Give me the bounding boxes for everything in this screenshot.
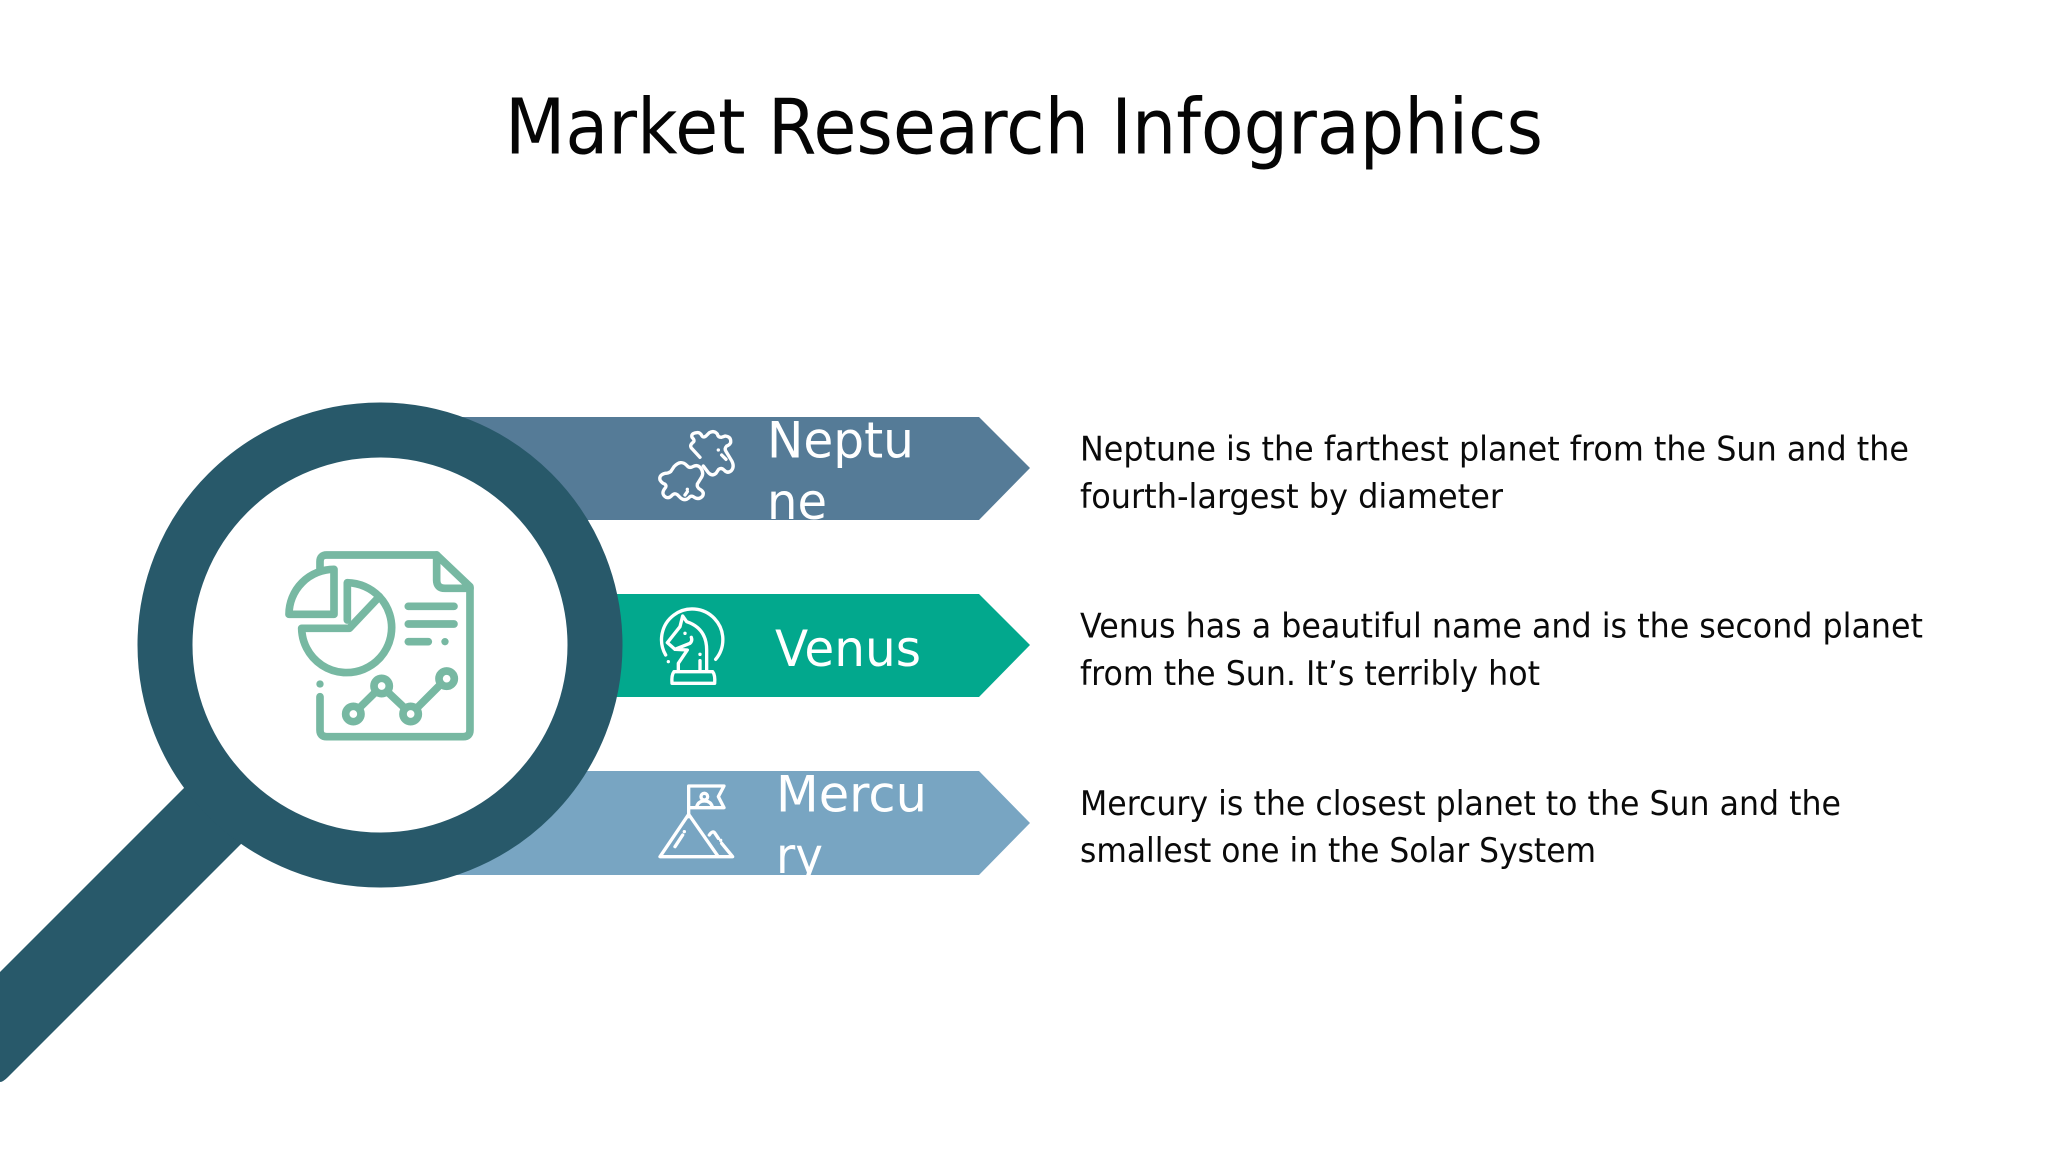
- label: Mercury: Mercu: [776, 766, 927, 824]
- text block: Neptune description: [1080, 430, 1909, 516]
- text block: Mercury description: [1080, 784, 1841, 870]
- text block: Venus description: from the Sun. It’s terribly hot: [1080, 654, 1540, 693]
- text block: Mercury description: smallest one in the Solar System: [1080, 831, 1596, 870]
- title: Market Research Infographics: [505, 84, 1543, 172]
- icon: puzzle pieces: [660, 432, 733, 500]
- text block: Neptune description: Neptune is the farthest planet from the Sun and the: [1080, 430, 1909, 468]
- label: Venus: Venus: [775, 620, 921, 678]
- icon: chess knight: [662, 609, 723, 683]
- text block: Venus description: [1080, 606, 1923, 693]
- label: Neptune: [771, 421, 910, 520]
- lens ring: [165, 430, 595, 860]
- icon: report document: [289, 555, 470, 737]
- label: Neptune: ne: [767, 473, 827, 531]
- label: Mercury: [780, 775, 922, 875]
- panel: Neptune ribbon: [462, 417, 1030, 520]
- text block: Mercury description: Mercury is the closest planet to the Sun and the: [1080, 784, 1841, 823]
- magnifying glass: [0, 430, 595, 1082]
- handle: [0, 772, 250, 1082]
- panel: Mercury ribbon: [457, 771, 1030, 875]
- icon: mountain with flag: [660, 786, 733, 857]
- label: Mercury: ry: [776, 827, 823, 885]
- text block: Neptune description: fourth-largest by diameter: [1080, 477, 1503, 516]
- panel: Venus ribbon: [400, 594, 1030, 697]
- text block: Venus description: Venus has a beautiful name and is the second planet: [1080, 606, 1923, 646]
- label: Neptune: Neptu: [767, 412, 914, 470]
